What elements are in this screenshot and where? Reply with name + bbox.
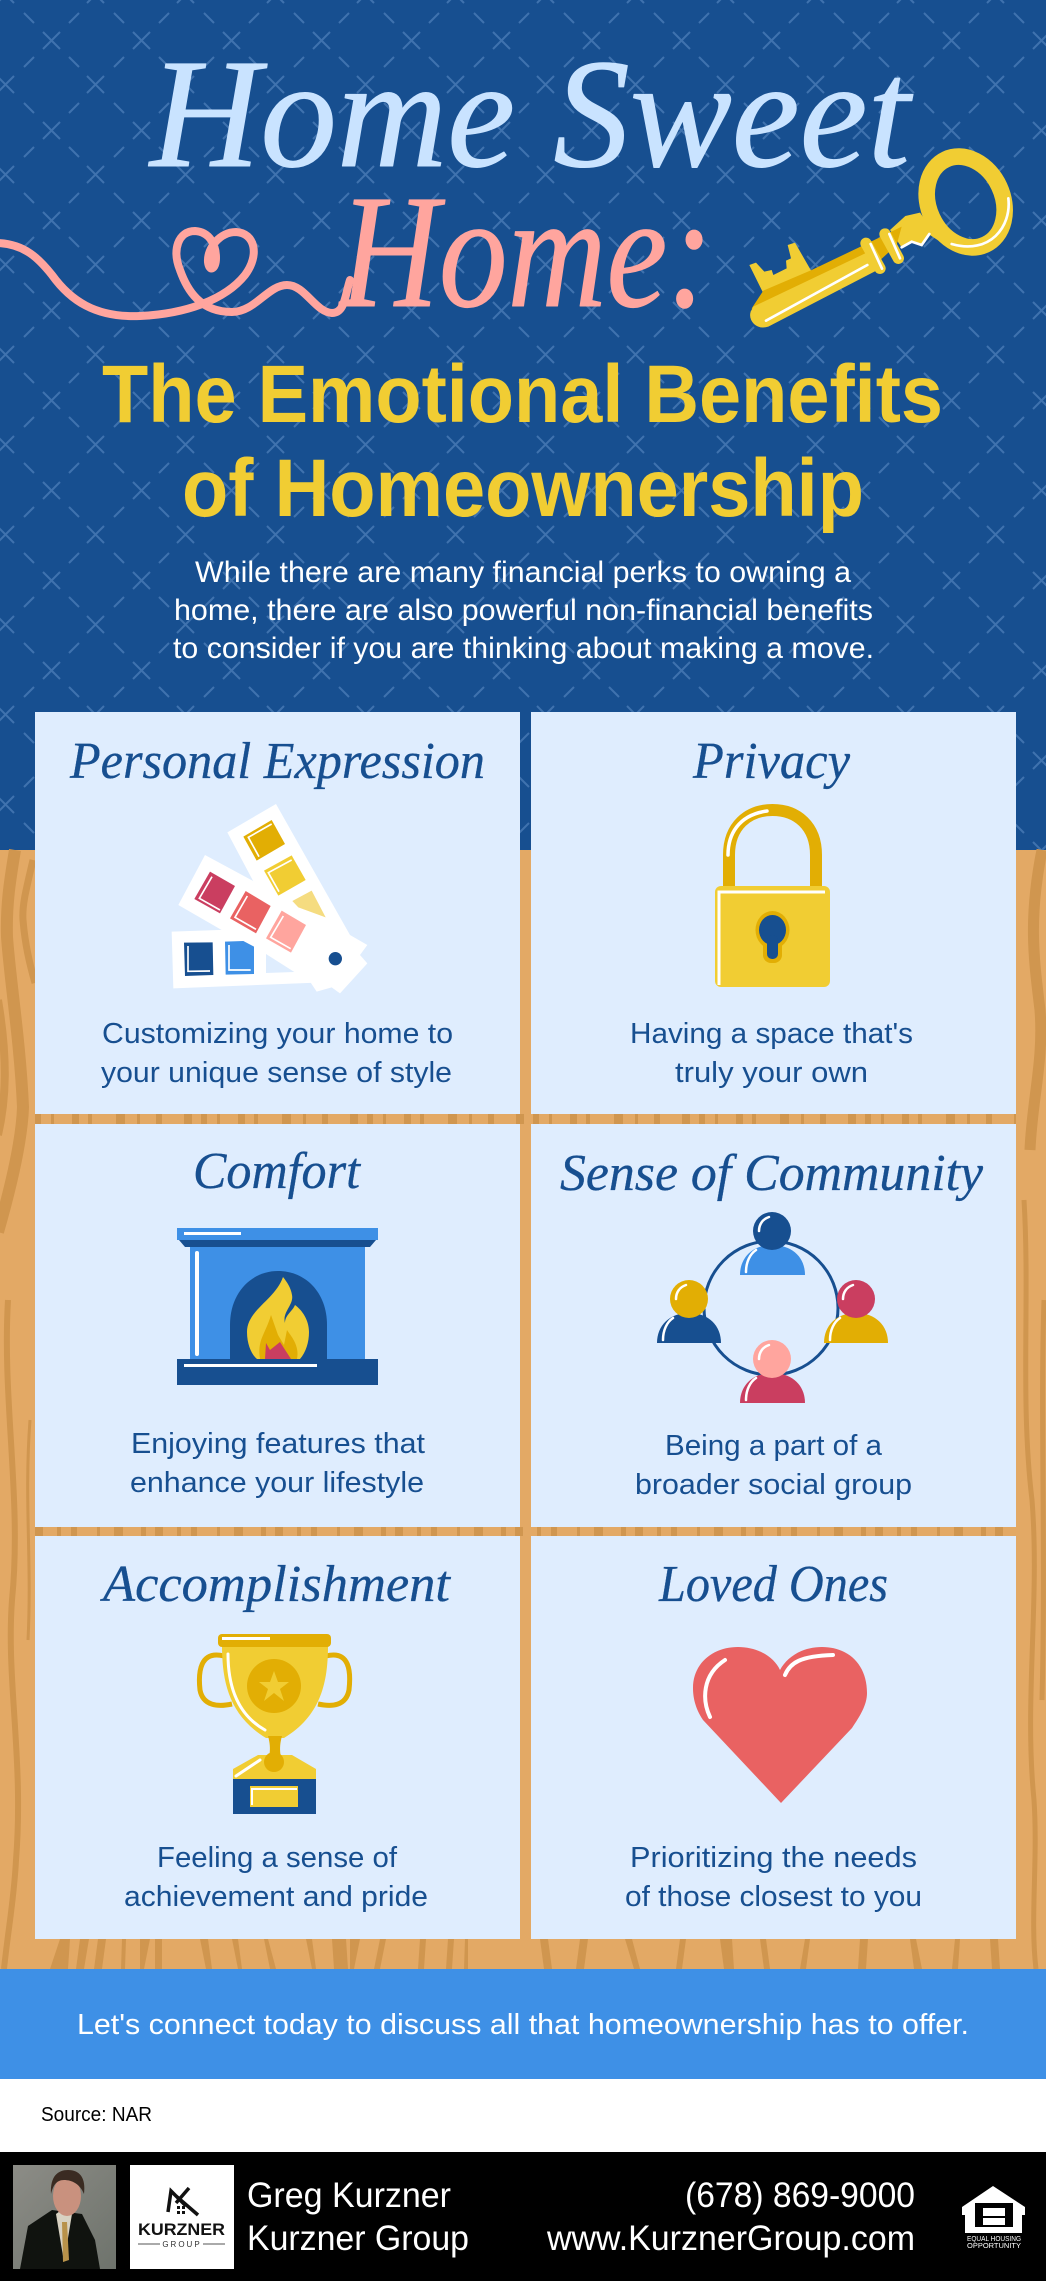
contact details: [546, 2176, 915, 2258]
intro text: to consider if you are thinking about making a move.: [173, 632, 874, 665]
description: comfort: [130, 1428, 425, 1499]
company logo: [130, 2165, 234, 2269]
heading: personal expression: Personal Expression: [69, 733, 485, 790]
wood background: [0, 850, 1046, 1969]
call to action banner: [0, 1969, 1046, 2079]
description: personal expression: your unique sense of style: [101, 1057, 452, 1089]
heading: sense of community: Sense of Community: [560, 1145, 984, 1202]
description: sense of community: [635, 1430, 912, 1501]
panel: comfort: [35, 1124, 520, 1527]
heading: privacy: Privacy: [692, 733, 851, 790]
title: Home Sweet: Home Sweet: [148, 27, 914, 200]
agent name: [247, 2176, 469, 2258]
intro text: [173, 556, 874, 665]
description: loved ones: [625, 1842, 922, 1913]
icon: people in a ring: [657, 1212, 888, 1403]
description: accomplishment: [124, 1842, 428, 1913]
source note: Source: NAR: [41, 2104, 152, 2126]
heading: The Emotional Benefits of Homeownership: of Homeownership: [182, 443, 864, 534]
panel: privacy: [531, 712, 1016, 1114]
description: comfort: Enjoying features that: [131, 1428, 425, 1460]
description: comfort: enhance your lifestyle: [130, 1467, 424, 1499]
description: sense of community: Being a part of a: [665, 1430, 883, 1462]
description: personal expression: Customizing your home to: [102, 1018, 453, 1050]
description: accomplishment: Feeling a sense of: [157, 1842, 398, 1874]
panel: personal expression: [35, 712, 520, 1114]
heading: comfort: Comfort: [193, 1143, 361, 1200]
contact details: www.KurznerGroup.com: [546, 2219, 915, 2258]
description: loved ones: of those closest to you: [625, 1881, 922, 1913]
icon: equal housing opportunity: [962, 2186, 1025, 2250]
icon: trophy: [199, 1634, 350, 1814]
agent photo: [13, 2165, 116, 2269]
panel: loved ones: [531, 1536, 1016, 1939]
panel: sense of community: [531, 1124, 1016, 1527]
description: privacy: [630, 1018, 913, 1089]
heading: loved ones: Loved Ones: [658, 1556, 888, 1613]
icon: equal housing opportunity: OPPORTUNITY: [967, 2241, 1021, 2250]
source note: [0, 2079, 1046, 2152]
footer bar: [0, 2152, 1046, 2281]
icon: golden key: [749, 144, 1019, 328]
icon: equal housing opportunity: EQUAL HOUSING: [967, 2234, 1021, 2243]
description: privacy: Having a space that's: [630, 1018, 913, 1050]
company logo: KURZNER: [138, 2220, 225, 2239]
intro text: While there are many financial perks to owning a: [195, 556, 851, 589]
header background: [0, 0, 1046, 850]
intro text: home, there are also powerful non-financial benefits: [174, 594, 873, 627]
title: Home with heart swash: Home:: [338, 163, 713, 342]
title: Home with heart swash: [0, 163, 713, 342]
icon: fireplace: [177, 1228, 378, 1385]
contact details: (678) 869-9000: [685, 2176, 915, 2215]
description: privacy: truly your own: [675, 1057, 868, 1089]
heading: The Emotional Benefits of Homeownership: The Emotional Benefits: [102, 349, 943, 440]
description: accomplishment: achievement and pride: [124, 1881, 428, 1913]
icon: red heart: [693, 1647, 867, 1803]
description: sense of community: broader social group: [635, 1469, 912, 1501]
heading: The Emotional Benefits of Homeownership: [102, 349, 943, 534]
call to action banner: Let's connect today to discuss all that homeownership has to offer.: [77, 2009, 969, 2041]
heading: accomplishment: Accomplishment: [100, 1556, 452, 1613]
icon: padlock: [715, 810, 830, 987]
agent name: Greg Kurzner: [247, 2176, 451, 2215]
description: loved ones: Prioritizing the needs: [630, 1842, 917, 1874]
company logo: GROUP: [162, 2240, 202, 2249]
icon: paint swatch fan: [172, 804, 367, 993]
panel: accomplishment: [35, 1536, 520, 1939]
agent name: Kurzner Group: [247, 2219, 469, 2258]
description: personal expression: [101, 1018, 453, 1089]
